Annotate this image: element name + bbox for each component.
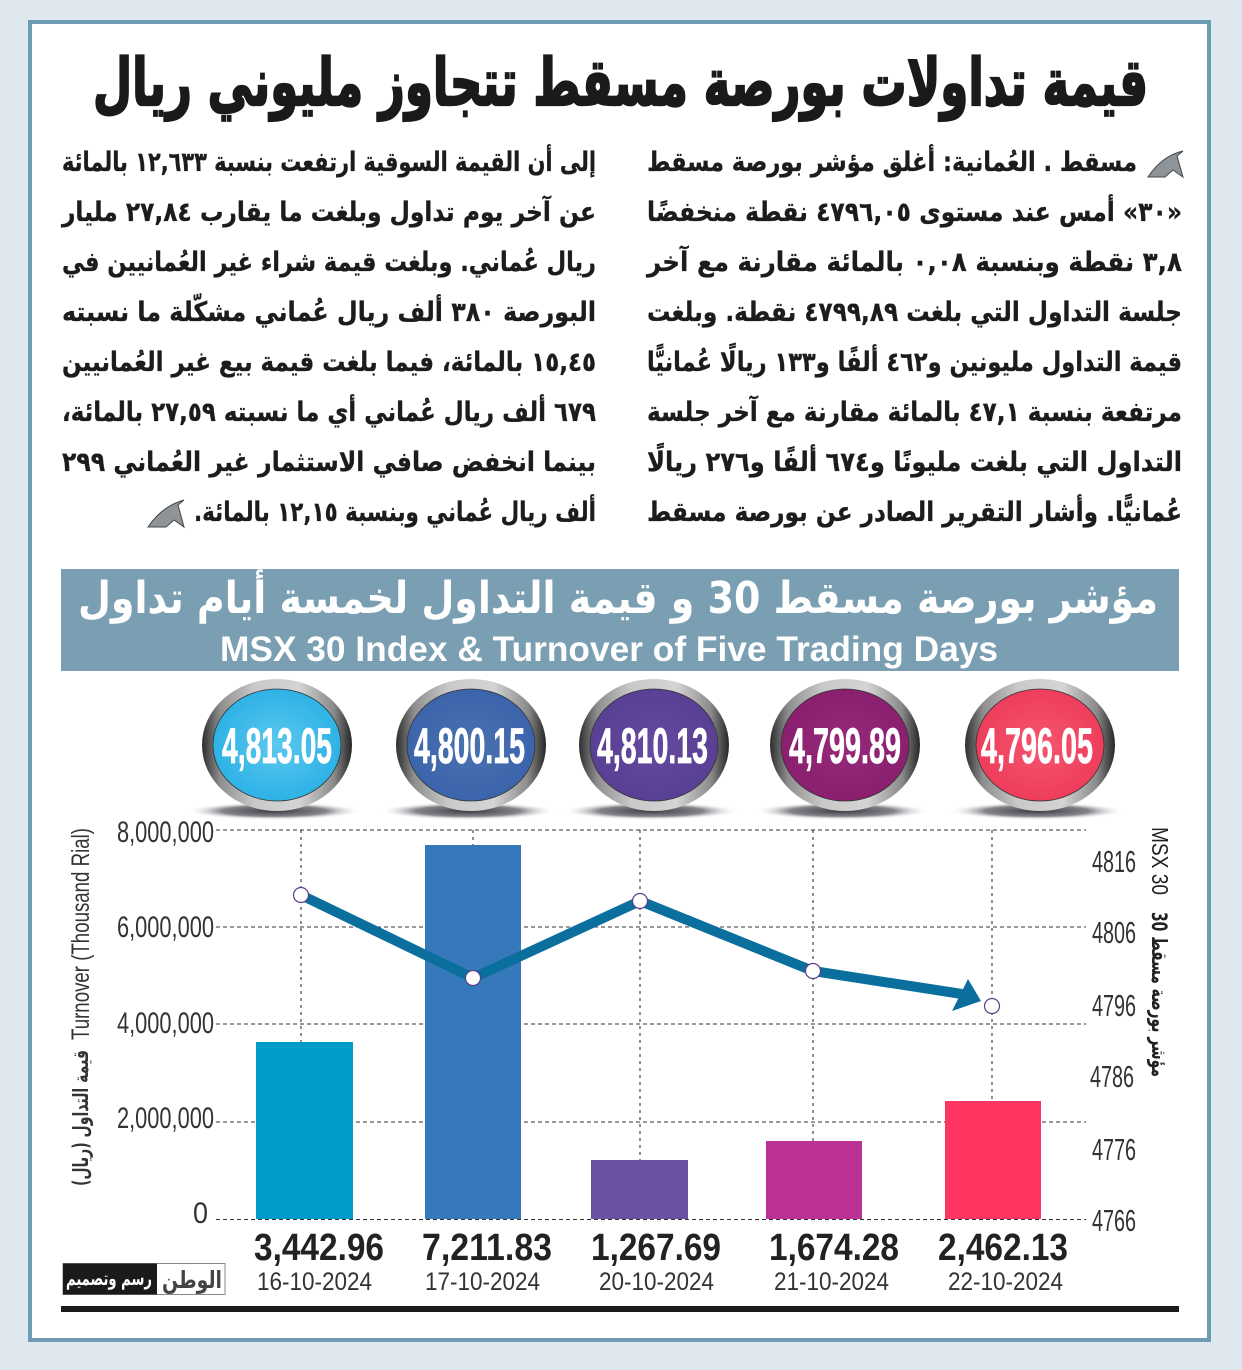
right axis title: MSX 30 bbox=[1147, 827, 1173, 895]
left axis labels: 8,000,000 bbox=[117, 816, 214, 849]
right axis labels: 4766 bbox=[1092, 1203, 1136, 1238]
badge 4,800.15: 4,800.15 bbox=[414, 718, 525, 774]
date labels: 21-10-2024 bbox=[774, 1268, 889, 1296]
badge 4,796.05 bbox=[949, 679, 1125, 820]
text block: left column: ألف ريال عُماني وبنسبة ١٢,١٥ بالمائة. bbox=[194, 494, 596, 528]
bar 17-10-2024 bbox=[425, 845, 521, 1219]
text block: right column: مرتفعة بنسبة ٤٧,١ بالمائة مقارنة مع آخر جلسة bbox=[647, 395, 1182, 428]
icon: sail ornament end bbox=[148, 500, 184, 527]
right axis labels: 4786 bbox=[1090, 1059, 1134, 1094]
index trend line with arrow bbox=[294, 888, 1000, 1014]
turnover values: 7,211.83 bbox=[422, 1227, 552, 1269]
bar 22-10-2024 bbox=[945, 1101, 1041, 1219]
badge 4,799.89: 4,799.89 bbox=[789, 718, 901, 774]
badge 4,813.05 bbox=[186, 679, 362, 820]
right axis labels: 4776 bbox=[1092, 1132, 1136, 1167]
left axis title: Turnover (Thousand Rial) bbox=[67, 828, 95, 1040]
banner bbox=[61, 569, 1179, 671]
text block: left column: إلى أن القيمة السوقية ارتفعت بنسبة ١٢,٦٣٣ بالمائة bbox=[62, 144, 596, 178]
text block: left column: بينما انخفض صافي الاستثمار غير العُماني ٢٩٩ bbox=[62, 447, 596, 478]
text block: right column bbox=[645, 144, 1183, 528]
turnover values: 2,462.13 bbox=[938, 1227, 1068, 1269]
right axis labels bbox=[1090, 844, 1136, 1238]
badge 4,810.13 bbox=[563, 679, 739, 820]
left axis labels: 0 bbox=[193, 1197, 208, 1230]
text block: right column: مسقط . العُمانية: أغلق مؤشر بورصة مسقط bbox=[647, 144, 1137, 178]
text block: left column bbox=[60, 144, 596, 528]
bottom rule bbox=[61, 1306, 1179, 1312]
text block: right column: قيمة التداول مليونين و٤٦٢ ألفًا و١٣٣ ريالًا عُمانيًّا bbox=[647, 342, 1182, 378]
text block: right column: التداول التي بلغت مليونًا و٦٧٤ ألفًا و٢٧٦ ريالًا bbox=[647, 442, 1182, 478]
right axis labels: 4806 bbox=[1092, 915, 1136, 950]
right axis labels: 4816 bbox=[1092, 844, 1136, 879]
right axis labels: 4796 bbox=[1092, 988, 1136, 1023]
text block: right column: «٣٠» أمس عند مستوى ٤٧٩٦,٠٥ نقطة منخفضًا bbox=[647, 194, 1182, 228]
left axis title: قيمة التداول (ريال) bbox=[69, 1050, 93, 1186]
text block: left column: ١٥,٤٥ بالمائة، فيما بلغت قيمة بيع غير العُمانيين bbox=[62, 347, 596, 378]
text block: left column: ريال عُماني. وبلغت قيمة شراء غير العُمانيين في bbox=[62, 247, 596, 278]
text block: right column: ٣,٨ نقطة وبنسبة ٠,٠٨ بالمائة مقارنة مع آخر bbox=[645, 245, 1182, 278]
date labels: 20-10-2024 bbox=[599, 1268, 714, 1296]
index value badges bbox=[186, 679, 1125, 820]
turnover values: 1,267.69 bbox=[591, 1227, 721, 1269]
left axis title bbox=[67, 828, 95, 1186]
badge 4,800.15 bbox=[380, 679, 556, 820]
bar 21-10-2024 bbox=[766, 1141, 862, 1219]
badge 4,813.05: 4,813.05 bbox=[222, 718, 332, 774]
date labels: 17-10-2024 bbox=[425, 1268, 540, 1296]
date labels bbox=[257, 1268, 1063, 1296]
turnover values bbox=[254, 1227, 1068, 1269]
icon: sail ornament bbox=[1148, 151, 1183, 177]
credit logo: الوطن bbox=[162, 1266, 222, 1294]
turnover values: 1,674.28 bbox=[769, 1227, 899, 1269]
banner Arabic heading: مؤشر بورصة مسقط 30 و قيمة التداول لخمسة أيام تداول bbox=[78, 569, 1158, 624]
turnover values: 3,442.96 bbox=[254, 1227, 384, 1269]
badge 4,799.89 bbox=[754, 679, 930, 820]
text block: left column: عن آخر يوم تداول وبلغت ما يقارب ٢٧,٨٤ مليار bbox=[60, 195, 596, 228]
credit logo bbox=[63, 1264, 225, 1294]
credit logo: رسم وتصميم bbox=[66, 1268, 152, 1290]
right axis title: 30 مؤشر بورصة مسقط bbox=[1147, 912, 1171, 1077]
text block: right column: جلسة التداول التي بلغت ٤٧٩٩,٨٩ نقطة. وبلغت bbox=[647, 297, 1182, 328]
banner English heading: MSX 30 Index & Turnover of Five Trading Days bbox=[220, 630, 998, 669]
text block: left column: ٦٧٩ ألف ريال عُماني أي ما نسبته ٢٧,٥٩ بالمائة، bbox=[62, 394, 596, 428]
date labels: 16-10-2024 bbox=[257, 1268, 372, 1296]
badge 4,810.13: 4,810.13 bbox=[597, 718, 708, 774]
right axis title bbox=[1147, 827, 1173, 1077]
left axis labels bbox=[117, 816, 214, 1230]
text block: left column: البورصة ٣٨٠ ألف ريال عُماني مشكّلة ما نسبته bbox=[62, 292, 596, 328]
bar 20-10-2024 bbox=[591, 1160, 688, 1219]
date labels: 22-10-2024 bbox=[948, 1268, 1063, 1296]
bar 16-10-2024 bbox=[256, 1042, 353, 1219]
chart bbox=[67, 816, 1173, 1296]
badge 4,796.05: 4,796.05 bbox=[981, 718, 1093, 774]
left axis labels: 4,000,000 bbox=[117, 1007, 214, 1040]
left axis labels: 2,000,000 bbox=[117, 1102, 214, 1135]
left axis labels: 6,000,000 bbox=[117, 911, 214, 944]
